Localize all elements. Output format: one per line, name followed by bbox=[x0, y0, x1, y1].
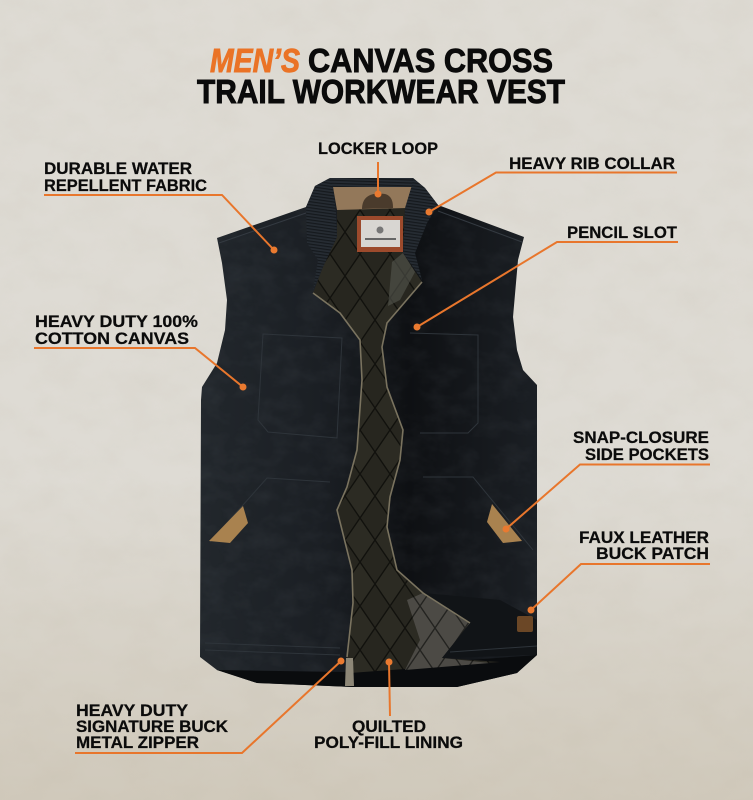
callout: pencil slot bbox=[414, 223, 678, 330]
zipper pull bbox=[345, 658, 354, 686]
right zipper bbox=[382, 282, 470, 623]
callout: faux leather buck patch: FAUX LEATHER bbox=[579, 528, 709, 547]
callout: heavy duty cotton canvas: COTTON CANVAS bbox=[35, 329, 189, 348]
chest pockets bbox=[258, 333, 478, 438]
title bbox=[197, 43, 565, 111]
vest body bbox=[200, 178, 537, 687]
callout: durable water repellent fabric: REPELLENT FABRIC bbox=[44, 176, 207, 195]
callout: heavy rib collar bbox=[426, 154, 677, 216]
left zipper bbox=[313, 293, 362, 657]
callout: pencil slot: PENCIL SLOT bbox=[567, 223, 678, 242]
callout: durable water repellent fabric: DURABLE WATER bbox=[44, 159, 192, 178]
vest illustration bbox=[195, 175, 540, 690]
buck leather patch bbox=[517, 616, 533, 632]
callout: heavy rib collar: HEAVY RIB COLLAR bbox=[509, 154, 675, 173]
callout: heavy duty cotton canvas bbox=[34, 312, 246, 390]
callout: metal zipper: SIGNATURE BUCK bbox=[76, 717, 229, 736]
callout: durable water repellent fabric bbox=[44, 159, 278, 254]
back hem band bbox=[200, 655, 537, 687]
callout: locker loop: LOCKER LOOP bbox=[318, 139, 438, 158]
locker loop bbox=[362, 194, 393, 209]
title: TRAIL WORKWEAR VEST bbox=[197, 74, 565, 111]
callout: faux leather buck patch: BUCK PATCH bbox=[596, 544, 709, 563]
callout: snap-closure side pockets bbox=[502, 428, 710, 532]
callout: faux leather buck patch bbox=[528, 528, 710, 614]
callout: quilted lining: POLY-FILL LINING bbox=[314, 733, 463, 752]
callout: locker loop bbox=[318, 139, 438, 198]
quilted lining bbox=[313, 208, 500, 673]
callout: heavy duty cotton canvas: HEAVY DUTY 100% bbox=[35, 312, 198, 331]
title: CANVAS CROSS bbox=[308, 43, 553, 80]
callout: metal zipper: METAL ZIPPER bbox=[76, 733, 199, 752]
rib collar bbox=[306, 178, 438, 290]
grey lining fold bbox=[405, 593, 490, 670]
lining sheen bbox=[388, 253, 415, 306]
title: MEN’S bbox=[210, 43, 300, 80]
callout: quilted lining bbox=[314, 658, 463, 752]
side pockets bbox=[205, 477, 537, 655]
shoulder seams bbox=[219, 211, 522, 243]
tan pocket patches bbox=[209, 504, 522, 543]
front flap bbox=[423, 593, 537, 658]
cloth texture bbox=[342, 350, 521, 512]
brand label bbox=[357, 216, 403, 252]
callout: quilted lining: QUILTED bbox=[352, 717, 426, 736]
callout: metal zipper bbox=[75, 658, 344, 753]
tan neck patch bbox=[333, 187, 412, 210]
callout: snap-closure side pockets: SNAP-CLOSURE bbox=[573, 428, 709, 447]
callout: snap-closure side pockets: SIDE POCKETS bbox=[585, 445, 709, 464]
callout: metal zipper: HEAVY DUTY bbox=[76, 701, 189, 720]
